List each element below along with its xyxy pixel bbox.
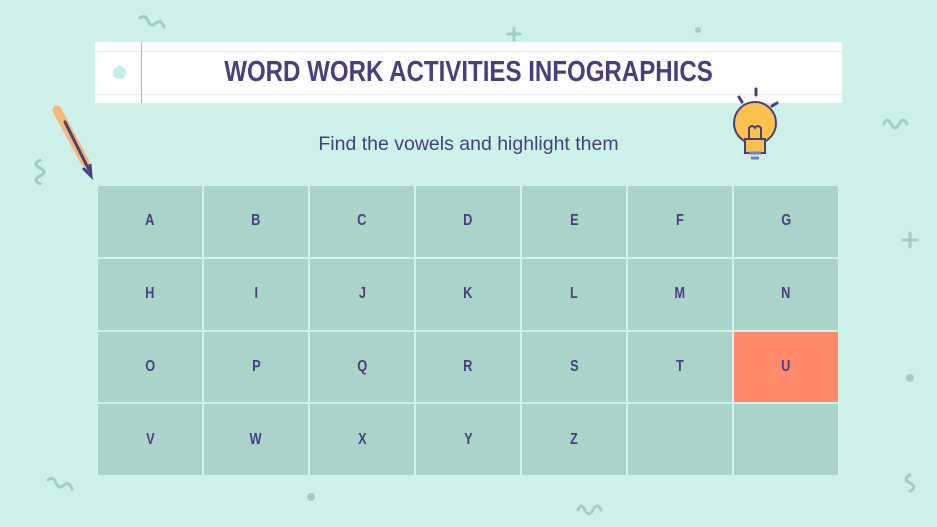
- letter grid: R: [463, 358, 473, 375]
- letter grid: A: [145, 212, 155, 229]
- letter grid: I: [254, 285, 258, 302]
- letter grid: E: [570, 212, 578, 229]
- letter grid: W: [250, 431, 262, 448]
- letter grid: Q: [357, 358, 367, 375]
- letter grid: C: [357, 212, 367, 229]
- letter grid: F: [676, 212, 684, 229]
- letter grid: H: [145, 285, 155, 302]
- letter grid: J: [358, 285, 366, 302]
- letter grid: U: [781, 358, 791, 375]
- letter grid: Y: [464, 431, 472, 448]
- letter grid: N: [781, 285, 791, 302]
- letter grid: [97, 185, 839, 476]
- letter grid: P: [252, 358, 260, 375]
- letter grid: G: [781, 212, 791, 229]
- icon: pencil: [52, 106, 93, 180]
- letter grid: X: [358, 431, 366, 448]
- letter grid: S: [570, 358, 578, 375]
- letter grid: D: [463, 212, 473, 229]
- title: WORD WORK ACTIVITIES INFOGRAPHICS: [224, 56, 713, 88]
- letter grid: Z: [570, 431, 578, 448]
- letter grid: K: [463, 285, 473, 302]
- letter grid: T: [676, 358, 684, 375]
- title banner: [95, 42, 842, 103]
- icon: light bulb: [733, 88, 779, 160]
- letter grid: O: [145, 358, 155, 375]
- letter grid: L: [570, 285, 578, 302]
- subtitle: Find the vowels and highlight them: [318, 133, 619, 155]
- letter grid: V: [146, 431, 154, 448]
- letter grid: M: [675, 285, 685, 302]
- letter grid: B: [251, 212, 261, 229]
